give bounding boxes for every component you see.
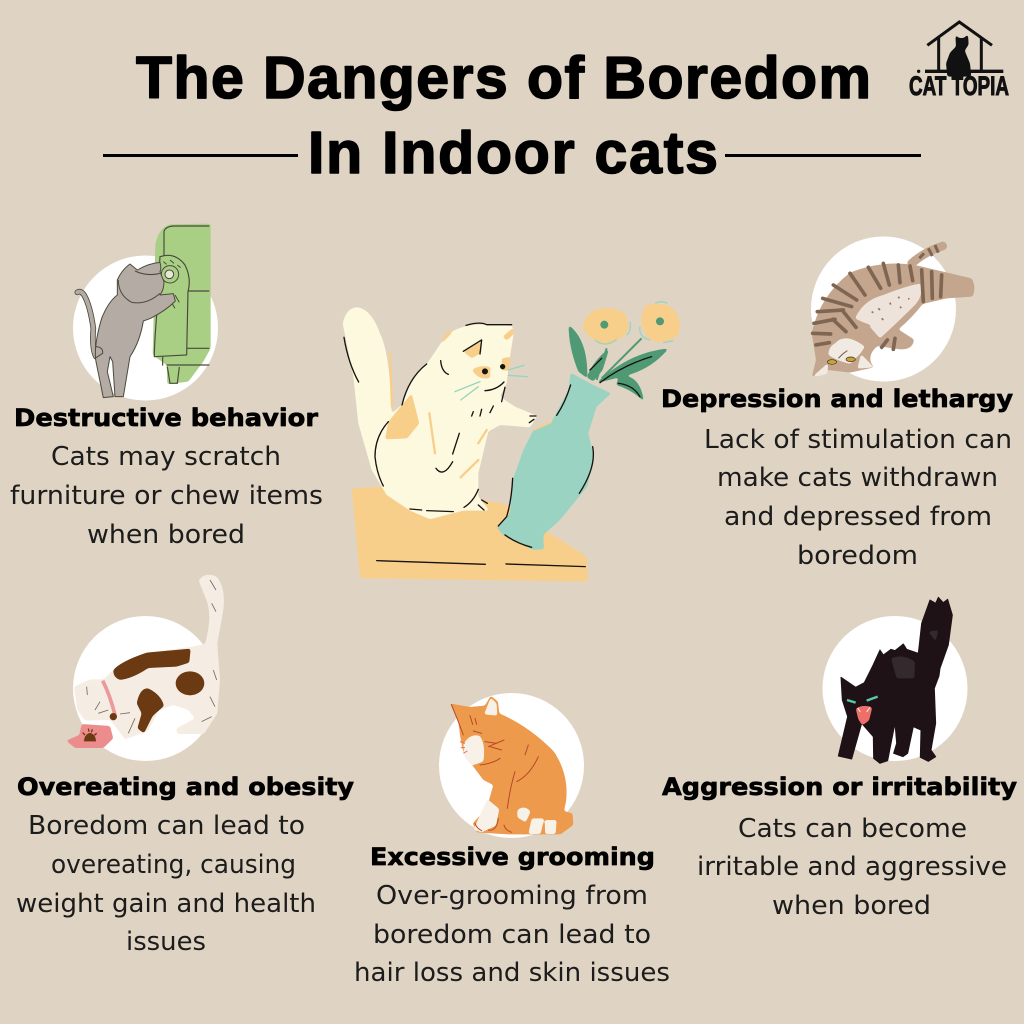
cat body <box>95 262 175 398</box>
icon: white circle <box>811 236 956 382</box>
text block <box>704 425 1012 571</box>
icon: white circle <box>822 616 968 761</box>
table <box>352 487 588 582</box>
logo: Cat Topia <box>909 22 1009 101</box>
cat line work <box>344 323 536 512</box>
icon: white circle <box>73 256 218 400</box>
text block: boredom <box>797 541 918 571</box>
text block: irritable and aggressive <box>697 852 1007 882</box>
title: The Dangers of Boredom <box>136 45 871 111</box>
icon: cat scratching sofa <box>77 224 211 398</box>
icon: tabby cat lying on its back <box>812 245 974 377</box>
text block: hair loss and skin issues <box>354 958 670 988</box>
text block <box>10 442 323 550</box>
cat body <box>343 307 537 519</box>
panel: excessive grooming <box>354 693 670 988</box>
text block: weight gain and health <box>16 889 316 919</box>
text block: boredom can lead to <box>373 920 651 950</box>
text block: overeating, causing <box>51 850 296 880</box>
table lines <box>377 561 585 567</box>
flowers and leaves <box>569 325 587 378</box>
icon: spotted cat eating from bowl <box>66 575 224 748</box>
panel: aggression or irritability <box>662 597 1017 921</box>
text block <box>697 814 1007 921</box>
icon: orange cat grooming <box>450 696 573 834</box>
text block <box>354 881 670 988</box>
panel: overeating and obesity <box>16 575 354 957</box>
text block <box>16 811 316 957</box>
text block: Lack of stimulation can <box>704 425 1012 455</box>
text block: when bored <box>772 891 931 921</box>
cat patches <box>385 327 514 439</box>
text block: Cats can become <box>738 814 967 844</box>
text block: when bored <box>87 520 245 550</box>
text block: make cats withdrawn <box>717 463 998 493</box>
title: In Indoor cats <box>308 120 718 186</box>
tail <box>77 292 96 357</box>
panel: central illustration of cat tipping a vase <box>343 302 680 582</box>
panel: depression and lethargy <box>661 236 1013 571</box>
text block: Over-grooming from <box>376 881 648 911</box>
title <box>103 45 921 186</box>
text block: Cats may scratch <box>51 442 281 472</box>
text block: and depressed from <box>724 502 992 532</box>
heading: Excessive grooming <box>370 843 655 871</box>
text block: issues <box>126 927 206 957</box>
heading: Depression and lethargy <box>661 385 1013 413</box>
heading: Aggression or irritability <box>662 773 1017 801</box>
panel: destructive behavior <box>10 224 323 550</box>
icon: white circle <box>73 616 218 761</box>
heading: Destructive behavior <box>14 404 318 432</box>
vase <box>497 373 611 550</box>
text block: Boredom can lead to <box>28 811 305 841</box>
heading: Overeating and obesity <box>17 773 354 801</box>
icon: arched black cat hissing <box>838 597 952 763</box>
text block: furniture or chew items <box>10 481 323 511</box>
icon: white circle <box>439 693 584 838</box>
